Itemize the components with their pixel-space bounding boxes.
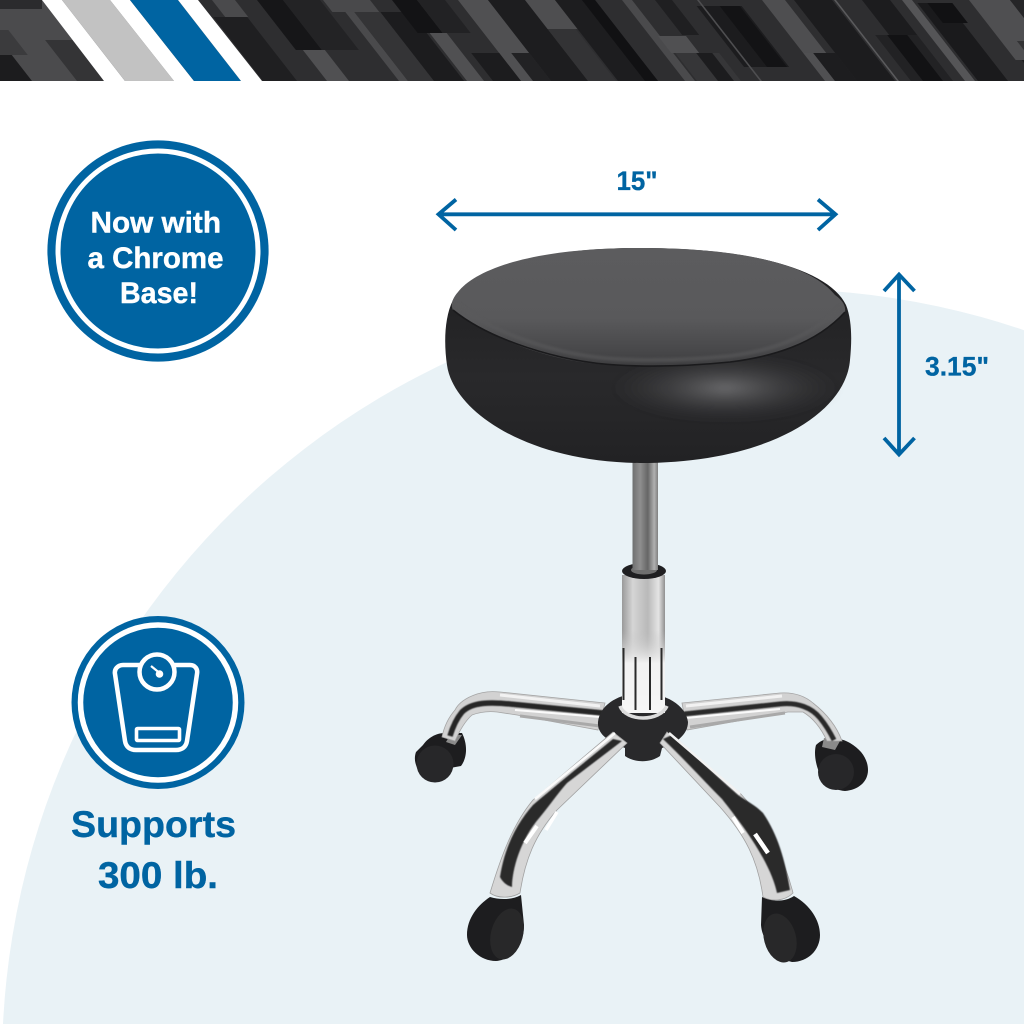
top patterned banner [0,0,1024,81]
hub [598,693,688,761]
rear right caster [815,738,868,791]
white stripe middle [110,0,194,81]
stool [415,248,868,966]
chrome column [620,560,667,718]
grey stripe [62,0,174,81]
front left caster [467,895,529,963]
white stripe left [42,0,125,81]
icon: scale dial [140,654,174,690]
badge: now with a chrome base: Now with [90,206,221,239]
cushion seat [445,248,851,463]
rear left caster [415,733,466,782]
badge: now with a chrome base: Base! [120,277,198,310]
background arc [3,289,1024,1024]
dimension: height 3.15 inches [884,274,989,455]
icon: scale display [136,728,180,740]
white stripe right [178,0,262,81]
front right caster [758,896,820,966]
gas lift piston [632,460,658,568]
badge: now with a chrome base: a Chrome [88,242,224,275]
capacity label: Supports [71,804,236,845]
front left leg [490,732,627,897]
capacity label [71,804,236,896]
dimension: height 3.15 inches: 3.15" [925,352,989,382]
icon: scale body [115,665,197,750]
icon: weighing scale badge [72,616,244,789]
front right leg [660,732,793,900]
dimension: width 15 inches: 15" [616,166,658,196]
badge: now with a chrome base [47,140,269,362]
blue stripe [130,0,241,81]
rear left leg [442,692,605,741]
capacity label: 300 lb. [98,855,218,896]
rear right leg [682,693,842,741]
dimension: width 15 inches [438,166,836,230]
